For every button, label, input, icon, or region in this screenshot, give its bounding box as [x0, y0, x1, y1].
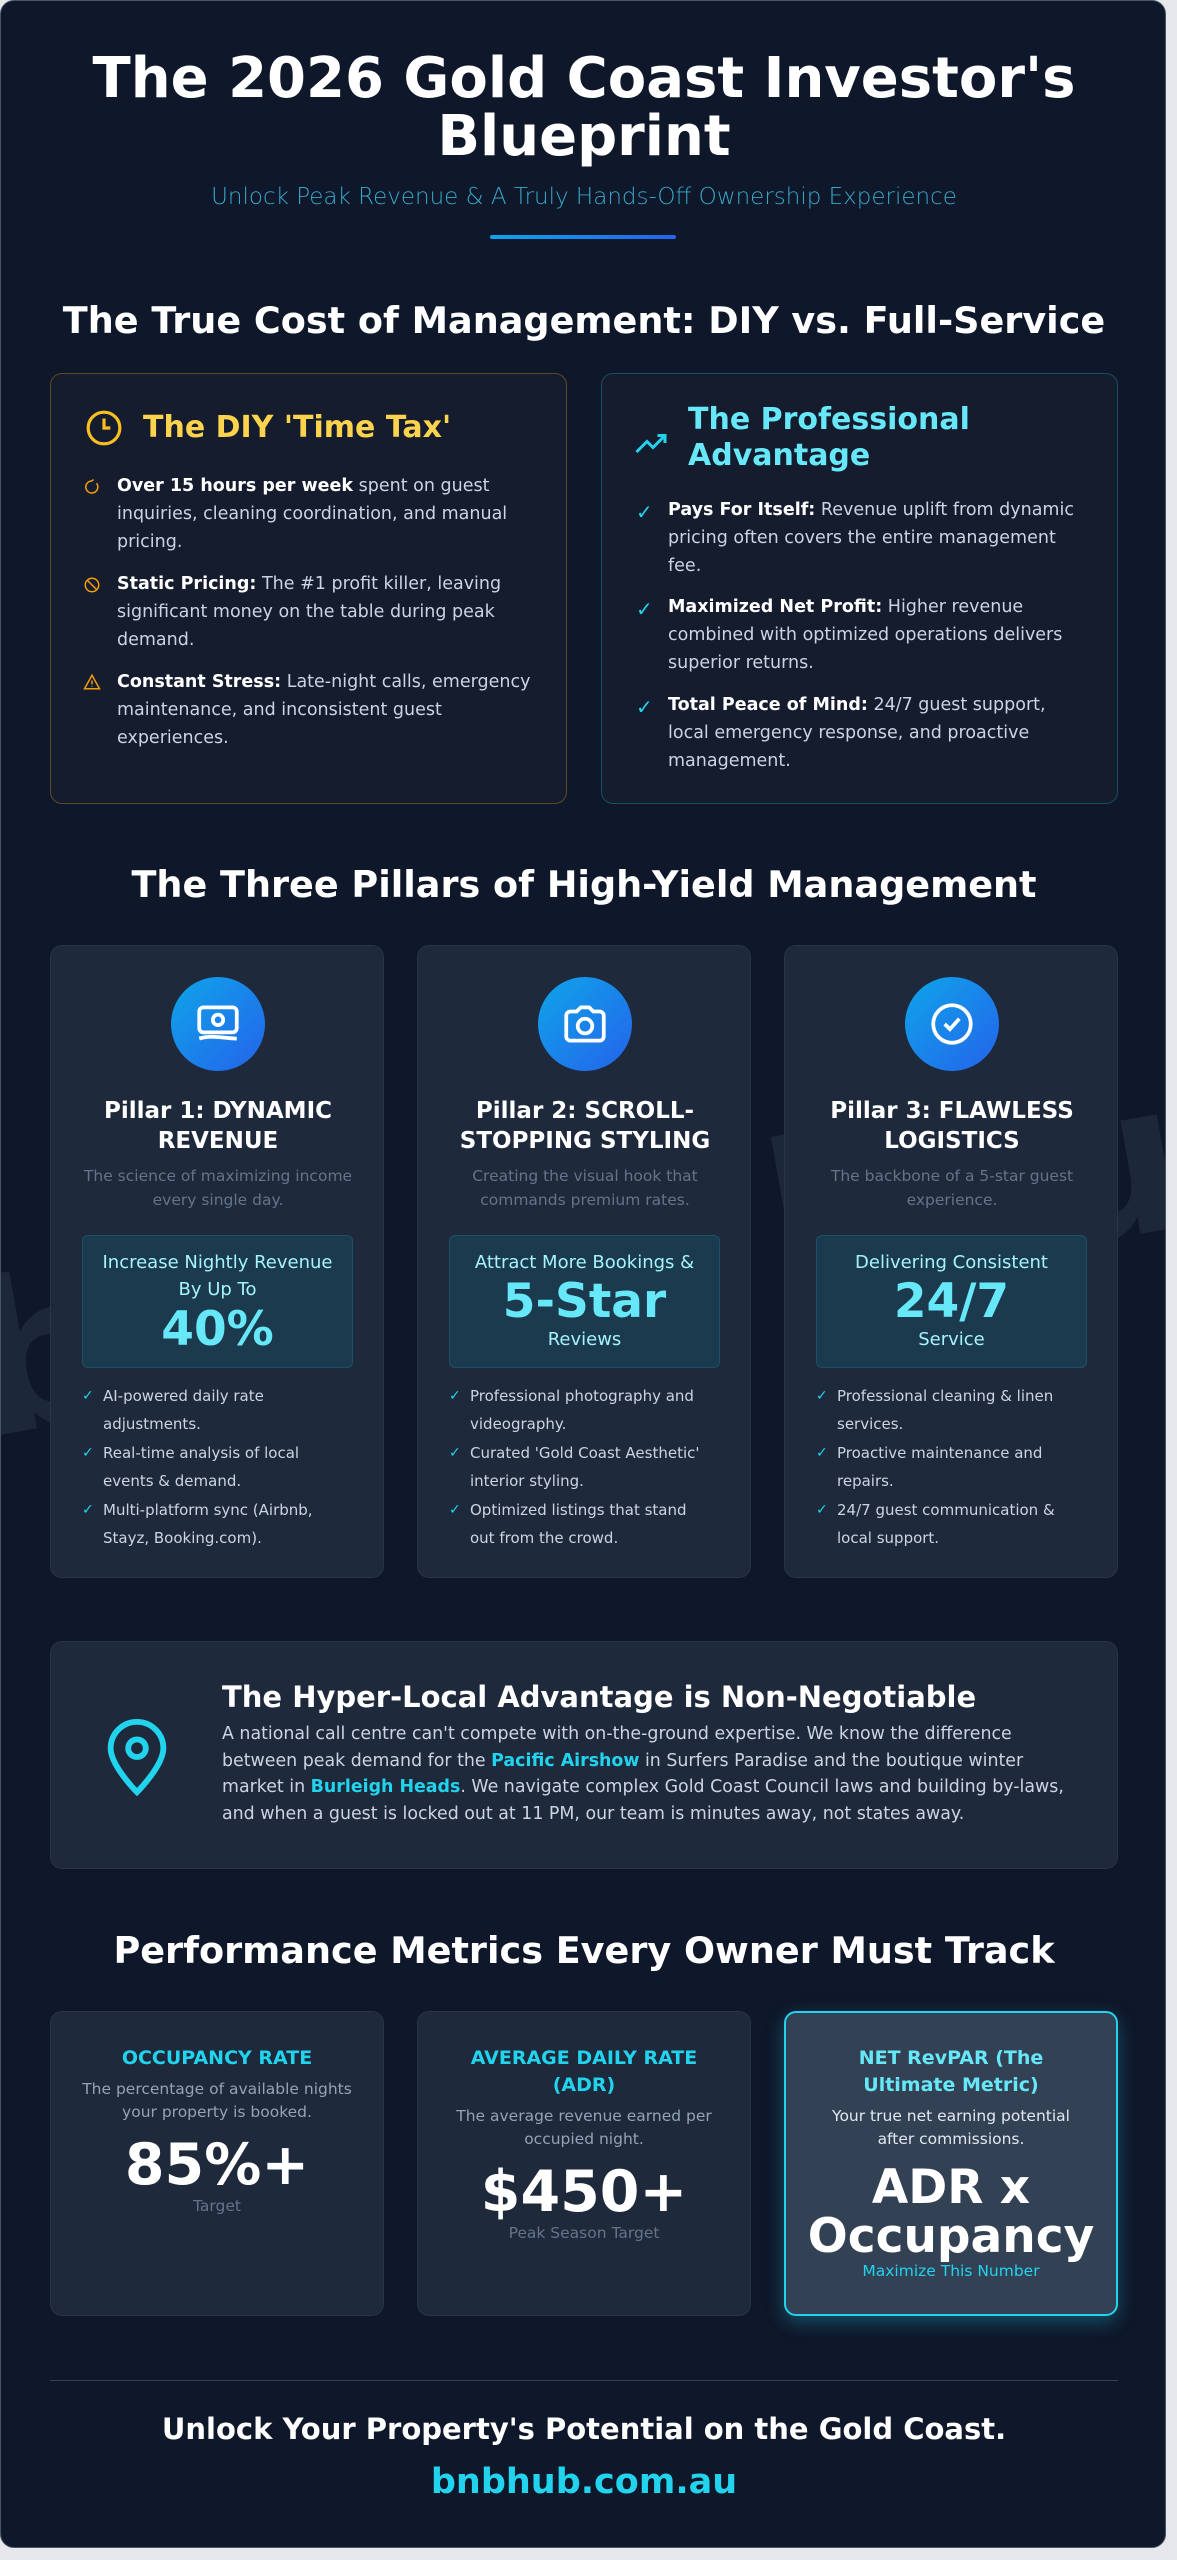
stat box: Delivering Consistent	[855, 1252, 1048, 1273]
pillar title	[104, 1098, 332, 1154]
heading: The Hyper-Local Advantage is Non-Negotiable	[222, 1680, 976, 1714]
icon: camera	[538, 977, 632, 1071]
footer url: bnbhub.com.au	[431, 2462, 737, 2502]
metric: RevPAR: NET RevPAR (The	[859, 2047, 1043, 2069]
item: profit: Maximized Net Profit: Higher revenue combined with optimized operations delivers superior returns.	[668, 597, 1062, 673]
panel: pillar 3: ✓	[816, 1502, 828, 1518]
panel: pillar 1: Real-time analysis of local events & demand.	[103, 1444, 299, 1490]
stat box: 24/7	[894, 1274, 1009, 1329]
body text: between peak demand for the Pacific Airshow in Surfers Paradise and the boutique winter	[222, 1750, 1023, 1770]
icon: money	[171, 977, 265, 1071]
stat box: 40%	[161, 1302, 274, 1357]
divider	[490, 235, 676, 239]
pillar title: STOPPING STYLING	[460, 1128, 710, 1154]
panel: pillar 1: ✓	[82, 1502, 94, 1518]
metric: occupancy: The percentage of available nights your property is booked.	[82, 2080, 352, 2121]
panel: pillar 1: ✓	[82, 1445, 94, 1461]
body text: market in Burleigh Heads. We navigate complex Gold Coast Council laws and building by-laws,	[222, 1777, 1064, 1797]
heading: pillars: The Three Pillars of High-Yield Management	[131, 863, 1037, 906]
stat box	[82, 1235, 353, 1368]
divider line	[50, 2380, 1118, 2381]
panel: pillar 3: ✓	[816, 1388, 828, 1404]
panel: pillar 3: ✓	[816, 1445, 828, 1461]
metric: RevPAR: ADR x	[872, 2160, 1030, 2215]
item: static pricing: Static Pricing: The #1 profit killer, leaving significant money on the table during peak demand.	[117, 574, 501, 650]
pillar title: REVENUE	[158, 1128, 278, 1154]
pillar title	[460, 1098, 710, 1154]
icon: check circle	[905, 977, 999, 1071]
pillar title: Pillar 2: SCROLL-	[476, 1098, 694, 1124]
body text: A national call centre can't compete with on-the-ground expertise. We know the difference	[222, 1724, 1012, 1744]
pillar desc: The backbone of a 5-star guest experience.	[831, 1167, 1073, 1209]
DIY heading: The DIY 'Time Tax'	[143, 410, 451, 445]
bullets: Professional cleaning & linen services.	[837, 1387, 1053, 1433]
panel: pillar 1: ✓	[82, 1388, 94, 1404]
panel: pillar 2: ✓	[449, 1502, 461, 1518]
panel: pillar 2: ✓	[449, 1388, 461, 1404]
bullets: Professional photography and videography.	[470, 1387, 694, 1433]
metric: RevPAR: Your true net earning potential after commissions.	[832, 2107, 1070, 2148]
metric: occupancy	[50, 2011, 384, 2316]
panel: professional: ✓	[636, 500, 653, 524]
subtitle: Unlock Peak Revenue & A Truly Hands-Off Ownership Experience	[211, 184, 957, 210]
icon: trend	[636, 434, 666, 453]
heading: true cost: The True Cost of Management: DIY vs. Full-Service	[63, 299, 1105, 342]
item: peace: Total Peace of Mind: 24/7 guest support, local emergency response, and proactive management.	[668, 695, 1046, 771]
title: Blueprint	[437, 104, 731, 169]
pillar title: LOGISTICS	[884, 1128, 1020, 1154]
panel: pillar 1	[50, 945, 384, 1578]
bullets: AI-powered daily rate adjustments.	[103, 1387, 264, 1433]
metric: RevPAR: Occupancy	[808, 2209, 1094, 2264]
body text: and when a guest is locked out at 11 PM, our team is minutes away, not states away.	[222, 1804, 964, 1824]
icon: clock	[86, 410, 122, 446]
metric: occupancy: Target	[193, 2197, 241, 2215]
panel: hyper-local	[50, 1641, 1118, 1869]
stat box: By Up To	[178, 1279, 256, 1300]
stat box	[449, 1235, 720, 1368]
pillar title	[830, 1098, 1074, 1154]
panel: pillar 2	[417, 945, 751, 1578]
pillar title: Pillar 1: DYNAMIC	[104, 1098, 332, 1124]
panel: professional: ✓	[636, 597, 653, 621]
metric: ADR: $450+	[481, 2159, 687, 2225]
stat box: 5-Star	[503, 1274, 666, 1329]
panel: pillar 3: 24/7 guest communication & local support.	[837, 1501, 1055, 1547]
stat box: Service	[918, 1329, 985, 1350]
pro heading	[688, 402, 970, 473]
pro heading: The Professional	[688, 402, 970, 437]
item: stress: Constant Stress: Late-night calls, emergency maintenance, and inconsistent guest experiences.	[117, 672, 530, 748]
icon: map pin	[108, 1719, 166, 1796]
panel: pillar 3: Proactive maintenance and repairs.	[837, 1444, 1042, 1490]
pro heading: Advantage	[688, 438, 870, 473]
panel: DIY	[50, 373, 567, 804]
pillar desc: Creating the visual hook that commands premium rates.	[472, 1167, 698, 1209]
body text	[222, 1724, 1064, 1824]
item: pays: Pays For Itself: Revenue uplift from dynamic pricing often covers the entire management fee.	[668, 500, 1074, 576]
metric: ADR: AVERAGE DAILY RATE	[471, 2047, 697, 2069]
panel: pillar 2: Curated 'Gold Coast Aesthetic' interior styling.	[470, 1444, 700, 1490]
metric: RevPAR: Ultimate Metric)	[863, 2074, 1039, 2096]
pillar desc: The science of maximizing income every single day.	[84, 1167, 352, 1209]
stat box: Increase Nightly Revenue	[102, 1252, 333, 1273]
panel: professional: ✓	[636, 695, 653, 719]
panel: pillar 1: Multi-platform sync (Airbnb, Stayz, Booking.com).	[103, 1501, 313, 1547]
panel: pillar 2: ✓	[449, 1445, 461, 1461]
metric: ADR: Peak Season Target	[509, 2224, 659, 2242]
metric: occupancy: OCCUPANCY RATE	[122, 2047, 312, 2069]
panel: pillar 2: Optimized listings that stand out from the crowd.	[470, 1501, 687, 1547]
panel: professional	[601, 373, 1118, 804]
metric: ADR: The average revenue earned per occupied night.	[456, 2107, 712, 2148]
metric: ADR: (ADR)	[553, 2074, 615, 2096]
metric: RevPAR	[784, 2011, 1118, 2316]
title: The 2026 Gold Coast Investor's	[93, 46, 1075, 111]
metric: ADR	[417, 2011, 751, 2316]
title	[92, 46, 1075, 169]
panel: pillar 3	[784, 945, 1118, 1578]
stat box: Reviews	[548, 1329, 621, 1350]
pillar title: Pillar 3: FLAWLESS	[830, 1098, 1074, 1124]
footer tagline: Unlock Your Property's Potential on the Gold Coast.	[162, 2412, 1006, 2446]
metric: occupancy: 85%+	[125, 2132, 309, 2198]
item: hours: Over 15 hours per week spent on guest inquiries, cleaning coordination, and manual pricing.	[117, 476, 507, 552]
metric: RevPAR: Maximize This Number	[862, 2262, 1040, 2280]
stat box	[816, 1235, 1087, 1368]
stat box: Attract More Bookings &	[475, 1252, 694, 1273]
heading: metrics: Performance Metrics Every Owner Must Track	[113, 1929, 1055, 1972]
